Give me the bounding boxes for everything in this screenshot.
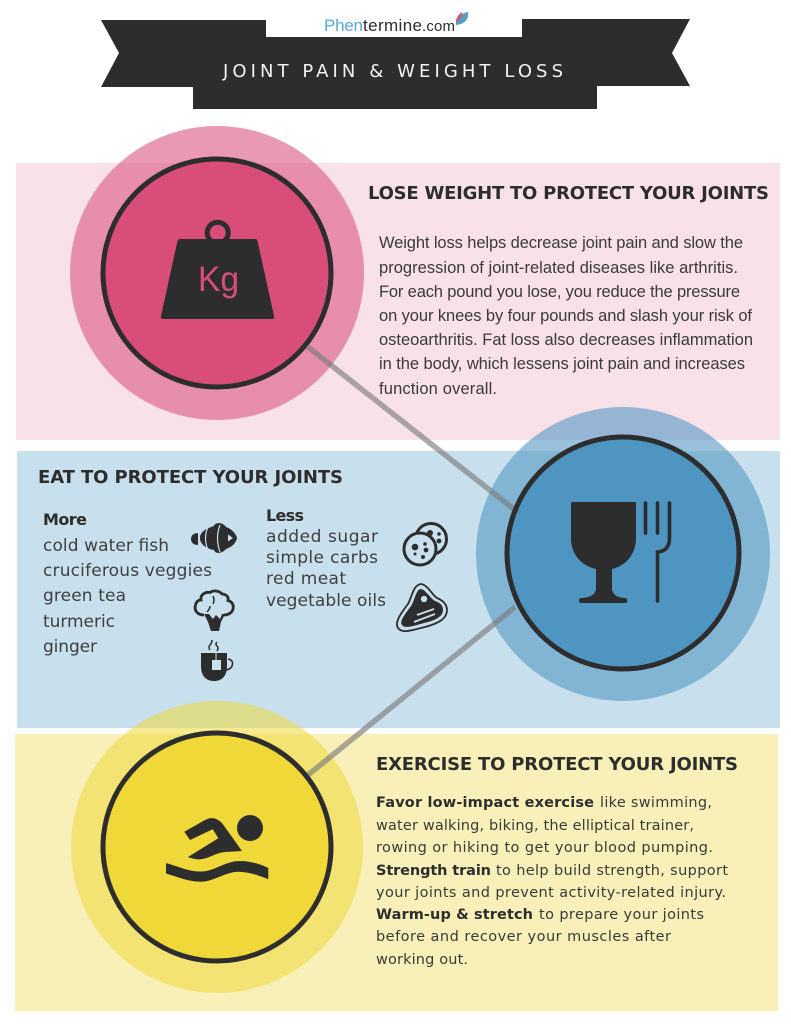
icon: goblet xyxy=(571,502,636,603)
circle: pink weight xyxy=(103,159,331,387)
icon: tea cup xyxy=(201,640,233,681)
connector: pink to blue xyxy=(308,347,515,510)
logo wordmark xyxy=(324,16,455,35)
list: more: ginger xyxy=(43,637,97,657)
list: more: cruciferous veggies xyxy=(43,561,212,581)
list: less xyxy=(266,506,386,611)
list: more: turmeric xyxy=(43,612,115,632)
icon: fish xyxy=(191,523,237,553)
circle halo: blue xyxy=(476,407,770,701)
text block: lose weight body xyxy=(379,234,753,398)
connector: yellow to blue xyxy=(308,607,515,775)
list: more: green tea xyxy=(43,586,126,606)
logo icon: leaf xyxy=(456,12,468,25)
icon: steak xyxy=(397,584,447,631)
text block: exercise body: Strength train xyxy=(376,863,491,879)
text block: exercise body: like swimming, xyxy=(600,795,712,811)
heading: lose weight: LOSE WEIGHT TO PROTECT YOUR JOINTS xyxy=(368,183,769,204)
text block: lose weight body: progression of joint-related diseases like arthritis. xyxy=(379,259,738,277)
list: less: vegetable oils xyxy=(266,591,386,611)
logo wordmark: termine xyxy=(363,16,422,35)
heading: eat: EAT TO PROTECT YOUR JOINTS xyxy=(38,467,343,488)
icon: swimmer xyxy=(166,815,268,882)
text block: lose weight body: Weight loss helps decrease joint pain and slow the xyxy=(379,234,743,252)
circle: blue food xyxy=(507,437,739,669)
text block: lose weight body: function overall. xyxy=(379,380,497,398)
text block: lose weight body: in the body, which lessens joint pain and increases xyxy=(379,355,745,373)
circle halo: pink xyxy=(70,126,364,420)
panel: lose weight background xyxy=(16,163,780,440)
text block: exercise body: water walking, biking, the elliptical trainer, xyxy=(376,818,694,834)
logo wordmark: Phen xyxy=(324,16,363,35)
text block: lose weight body: on your knees by four pounds and slash your risk of xyxy=(379,307,752,325)
text block: exercise body: Favor low-impact exercise xyxy=(376,795,594,811)
list: more xyxy=(43,510,212,657)
text block: exercise body: before and recover your muscles after xyxy=(376,929,671,945)
icon: cookies xyxy=(404,524,446,565)
text block: exercise body: to help build strength, support xyxy=(496,863,728,879)
icon: fork xyxy=(646,503,670,601)
heading: exercise: EXERCISE TO PROTECT YOUR JOINTS xyxy=(376,754,738,775)
text block: exercise body xyxy=(376,795,728,968)
panel: exercise background xyxy=(15,734,778,1011)
icon: kg weight xyxy=(161,222,274,319)
list: more: cold water fish xyxy=(43,536,169,556)
logo wordmark: .com xyxy=(422,18,455,35)
text block: lose weight body: osteoarthritis. Fat loss also decreases inflammation xyxy=(379,331,753,349)
text block: exercise body: rowing or hiking to get your blood pumping. xyxy=(376,840,713,856)
header ribbon xyxy=(101,19,690,109)
icon: kg weight: Kg xyxy=(198,260,239,299)
list: more: More xyxy=(43,510,87,529)
title: JOINT PAIN & WEIGHT LOSS xyxy=(222,61,563,82)
list: less: red meat xyxy=(266,569,346,589)
list: less: Less xyxy=(266,506,304,525)
text block: exercise body: your joints and prevent activity-related injury. xyxy=(376,885,726,901)
panel: eat background xyxy=(17,451,780,728)
circle: yellow swim xyxy=(103,733,331,961)
text block: exercise body: working out. xyxy=(376,952,468,968)
text block: lose weight body: For each pound you lose, you reduce the pressure xyxy=(379,283,740,301)
text block: exercise body: Warm-up & stretch xyxy=(376,907,533,923)
circle halo: yellow xyxy=(71,701,363,993)
text block: exercise body: to prepare your joints xyxy=(539,907,704,923)
list: less: added sugar xyxy=(266,527,378,547)
list: less: simple carbs xyxy=(266,548,378,568)
icon: broccoli xyxy=(195,591,233,631)
